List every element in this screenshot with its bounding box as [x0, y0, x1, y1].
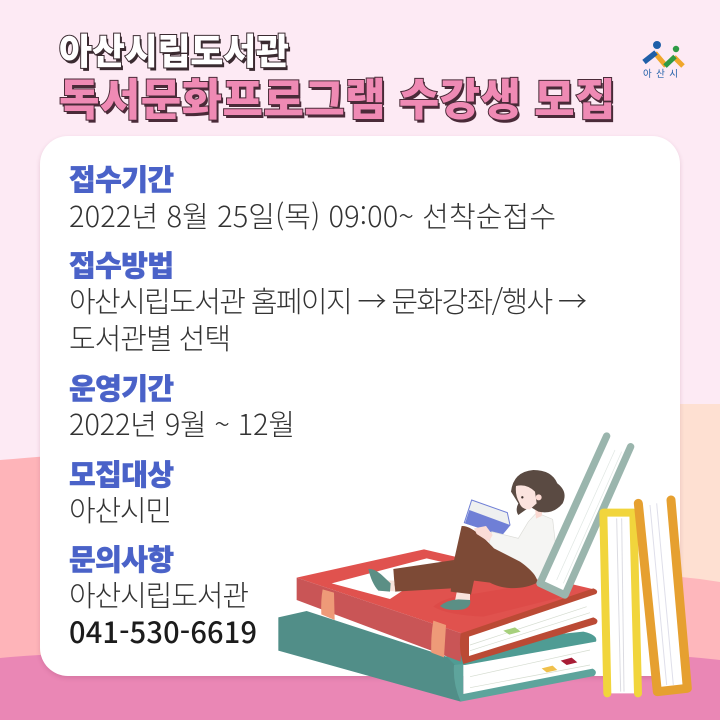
leaning orange book	[638, 500, 688, 692]
trousers	[451, 526, 537, 595]
heading: eligibility: 모집대상	[69, 452, 174, 494]
shirt	[488, 513, 556, 582]
open book in hand	[464, 500, 510, 535]
shoe	[455, 592, 470, 601]
heading: application period: 접수기간	[69, 157, 174, 199]
woman reading	[368, 470, 565, 610]
text: eligibility: 아산시민	[69, 488, 172, 530]
logo: Asan city: 아산시	[643, 66, 678, 80]
text: phone number: 041-530-6619	[69, 610, 257, 652]
title line 1: 아산시립도서관	[59, 23, 289, 75]
hand	[474, 526, 493, 542]
upright yellow book	[603, 512, 638, 693]
text: library name: 아산시립도서관	[69, 573, 249, 615]
heading: inquiries: 문의사항	[69, 537, 174, 579]
text: operating period: 2022년 9월 ~ 12월	[69, 402, 295, 444]
extended leg and foot	[393, 560, 454, 592]
face	[516, 485, 537, 509]
green book	[278, 611, 597, 702]
text: library selection: 도서관별 선택	[69, 316, 231, 358]
neck	[535, 507, 543, 519]
hair	[511, 470, 565, 515]
title line 2: 독서문화프로그램 수강생 모집	[59, 64, 616, 128]
heading: application method: 접수방법	[69, 243, 174, 285]
panel: information card	[40, 136, 680, 676]
heading: operating period: 운영기간	[69, 366, 174, 408]
red book	[297, 549, 597, 664]
logo: Asan city	[642, 41, 685, 80]
leaning teal book	[540, 436, 631, 595]
text: application method: 아산시립도서관 홈페이지 → 문화강좌/행사 →	[69, 279, 587, 321]
text: application period: 2022년 8월 25일(목) 09:00~ 선착순접수	[69, 194, 556, 236]
